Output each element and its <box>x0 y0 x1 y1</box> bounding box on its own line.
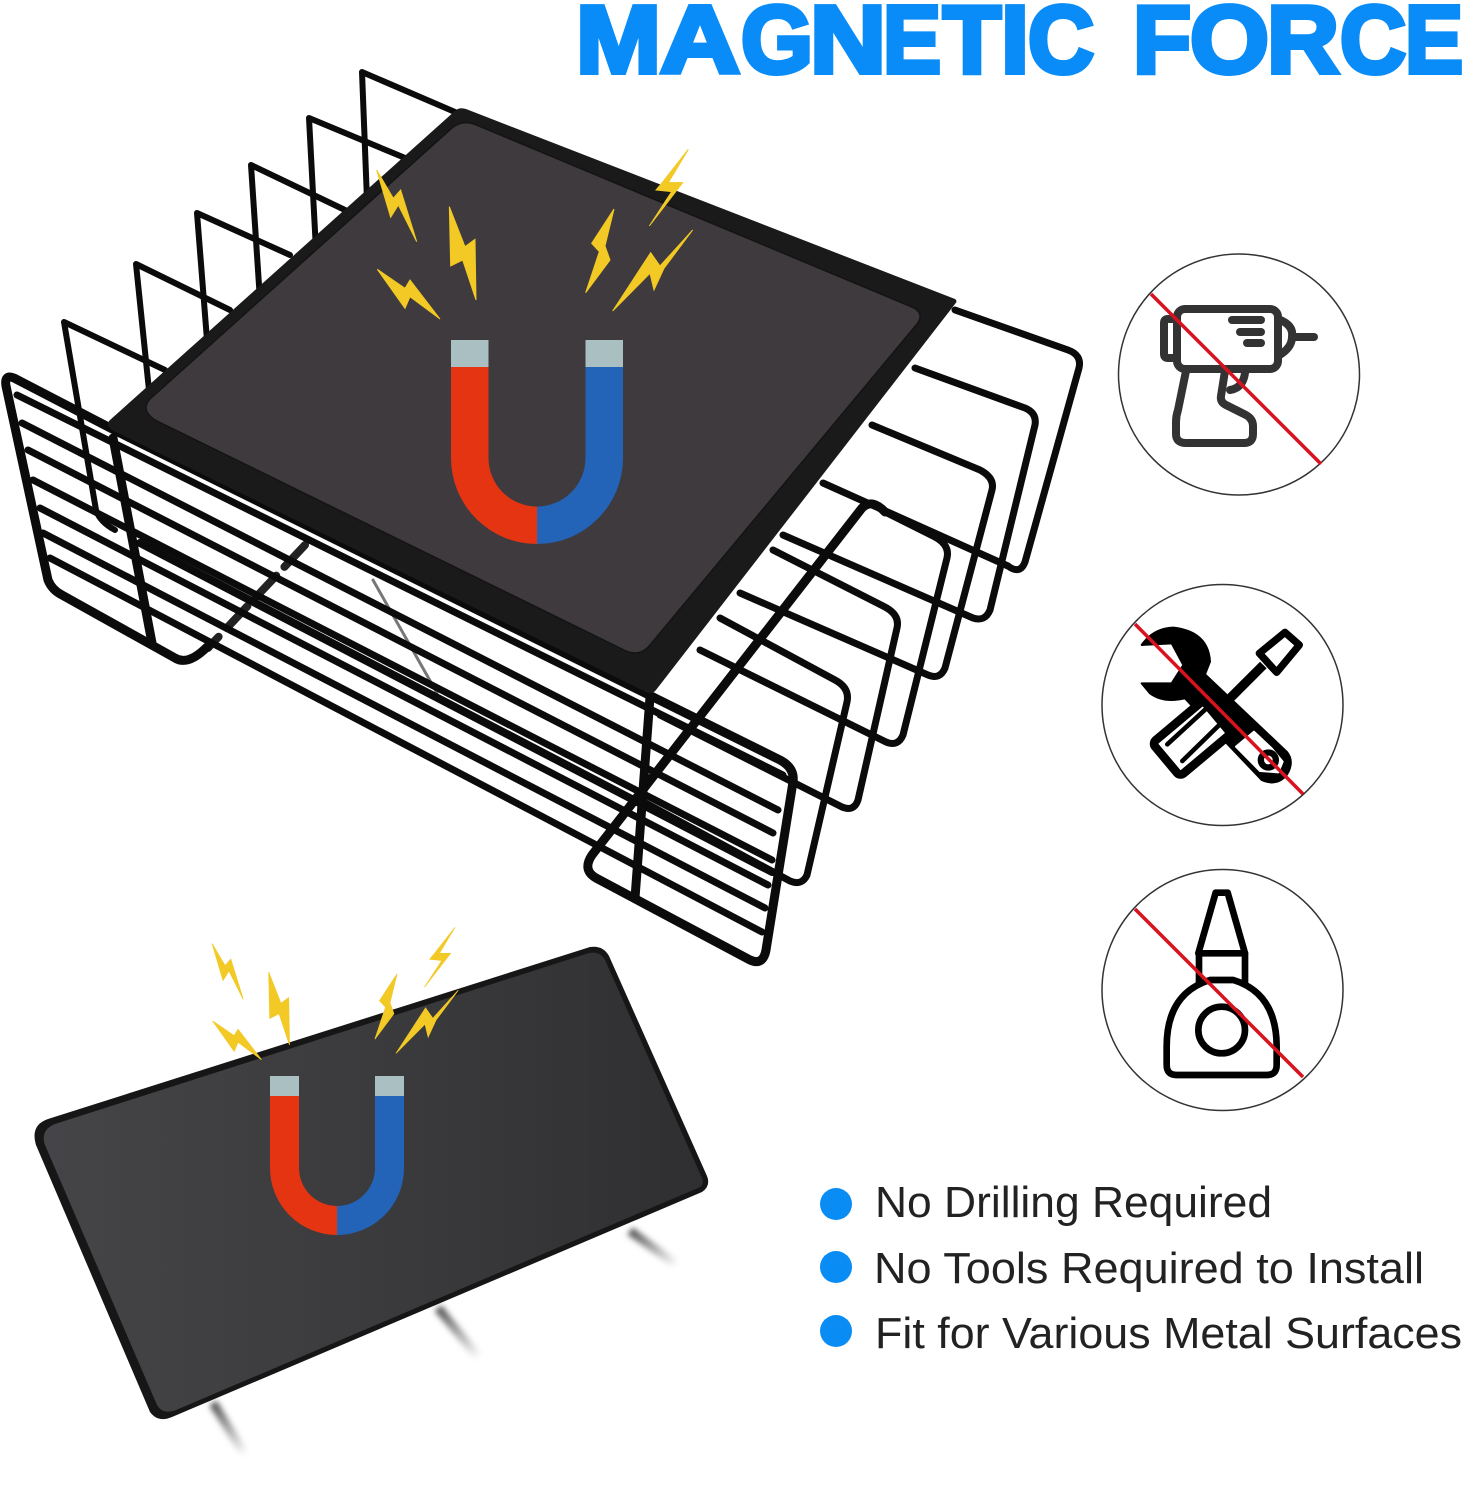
back dividers right side <box>640 310 1080 883</box>
wire rack product photo <box>6 72 1080 962</box>
loose magnetic plate <box>34 947 708 1455</box>
screwdriver handle <box>1152 700 1231 776</box>
front grid frame <box>6 377 885 962</box>
front grid wires <box>17 395 783 932</box>
bullet: no tools: No Tools Required to Install <box>874 1244 1424 1293</box>
underside shadows <box>208 545 437 693</box>
magnet icon small <box>270 1076 404 1235</box>
plate face <box>44 953 703 1412</box>
bullet: no drilling: No Drilling Required <box>875 1178 1272 1227</box>
magnet icon large <box>451 340 623 544</box>
plate shadows <box>213 1231 677 1455</box>
icon: no drill <box>1118 254 1360 495</box>
icon: no tools <box>1102 584 1343 826</box>
lightning bolts small <box>212 927 458 1060</box>
screwdriver shaft and tip <box>1230 632 1299 698</box>
main plate <box>108 108 956 693</box>
outer plate <box>108 108 956 693</box>
title <box>576 0 1463 94</box>
front posts <box>113 438 650 898</box>
bullet: metal surfaces: Fit for Various Metal Surfaces <box>875 1309 1462 1358</box>
wrench <box>1142 628 1291 782</box>
magnetic sheet <box>146 123 920 653</box>
lightning bolts large <box>377 149 693 319</box>
feature list <box>820 1178 1462 1358</box>
icon: no glue <box>1102 870 1343 1110</box>
back dividers left side <box>64 72 455 530</box>
plate edge <box>34 947 708 1419</box>
